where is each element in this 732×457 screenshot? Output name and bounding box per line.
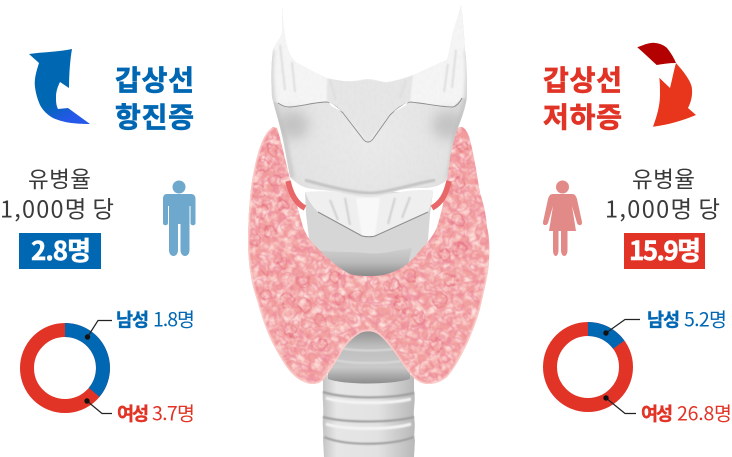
donut chart: male vs female [550,329,626,405]
illustration: thyroid and larynx [240,0,495,457]
trachea [323,330,415,457]
callout: male 5.2: 5.2명 [684,304,727,332]
icon: up arrow [29,49,90,124]
heading: hypothyroidism: 갑상선 [543,59,622,99]
connector vessels [288,181,449,208]
panel: hypothyroidism [543,43,732,426]
callout: female 26.8: 여성 [641,400,673,426]
value badge: 2.8: 2.8명 [31,231,91,268]
heading: hyperthyroidism [115,59,194,136]
callout: female 3.7: 3.7명 [152,398,195,426]
callout: male 1.8: 남성 [116,306,149,332]
callout: female 3.7: 여성 [117,400,149,426]
callout: female 26.8: 26.8명 [677,398,732,426]
callout: female 26.8 [603,395,732,426]
cricoid cartilage [305,190,433,276]
callout: male 5.2: 남성 [647,306,680,332]
icon: male figure [163,180,196,256]
icon: down arrow [637,43,696,127]
text: prevalence per 1,000 [605,162,720,224]
text: prevalence per 1,000: 유병율 [632,162,695,194]
heading: hypothyroidism [543,59,622,136]
thyroid cartilage [271,6,467,197]
callout: female 3.7 [84,398,195,426]
donut chart: male vs female [27,330,103,406]
text: prevalence per 1,000: 1,000명 당 [0,190,114,224]
callout: male 5.2 [603,304,727,336]
icon: female figure [543,180,582,256]
thyroid gland [240,120,495,390]
callout: male 1.8: 1.8명 [153,304,195,332]
text: prevalence per 1,000: 1,000명 당 [605,190,720,224]
heading: hyperthyroidism: 갑상선 [115,59,194,99]
panel: hyperthyroidism [0,49,196,426]
heading: hyperthyroidism: 항진증 [115,96,194,136]
text: prevalence per 1,000: 유병율 [28,162,91,194]
callout: male 1.8 [85,304,195,340]
text: prevalence per 1,000 [0,162,114,224]
heading: hypothyroidism: 저하증 [543,96,622,136]
value badge: 15.9: 15.9명 [629,231,701,268]
